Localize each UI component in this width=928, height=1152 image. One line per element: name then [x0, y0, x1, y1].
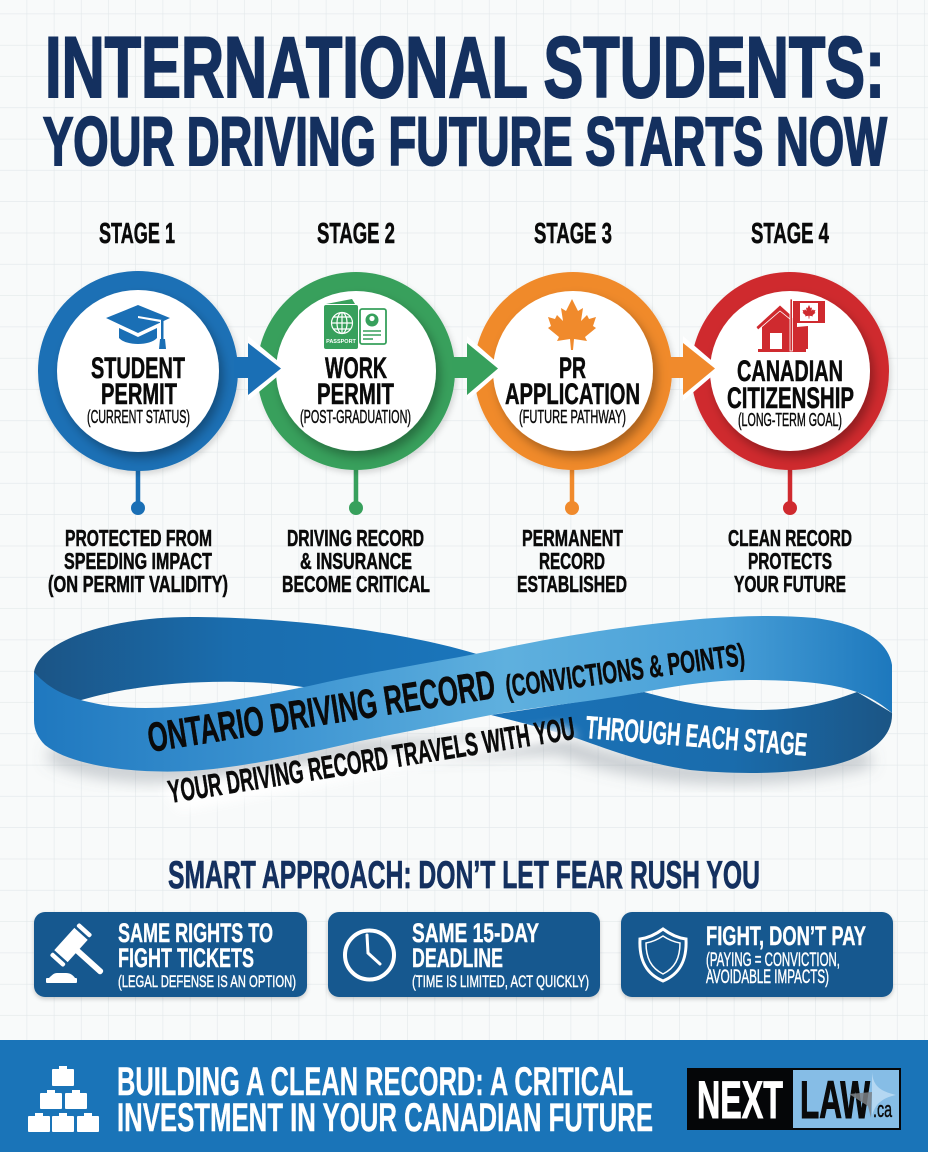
card: same rights to fight tickets [34, 912, 307, 997]
stage 3 caption: ESTABLISHED [517, 571, 627, 597]
arrow: stage 3 to stage 4 [669, 336, 721, 401]
infinity ribbon: Ontario driving record: (CONVICTIONS & POINTS) [503, 637, 747, 704]
stage 4: Canadian citizenship: (LONG-TERM GOAL) [738, 410, 842, 430]
stage 4 caption: PROTECTS [748, 548, 832, 574]
stage 1: student permit [38, 271, 238, 515]
card: same rights to fight tickets: FIGHT TICKETS [118, 943, 254, 973]
stage 1: student permit: (CURRENT STATUS) [87, 407, 190, 427]
icon: passport and ID card [324, 299, 386, 349]
stage 2 caption: DRIVING RECORD [287, 525, 424, 551]
title [43, 20, 888, 180]
stage 3: PR application: PR [559, 352, 586, 385]
logo: Next Law: NEXT [697, 1071, 783, 1130]
stage 2: work permit: WORK [325, 352, 387, 385]
card: same 15-day deadline [328, 912, 600, 997]
card: fight, don't pay: AVOIDABLE IMPACTS) [706, 967, 829, 988]
stage 2: work permit: PERMIT [317, 378, 394, 411]
stage 3 caption [517, 525, 627, 597]
stage 1 caption: (ON PERMIT VALIDITY) [48, 571, 228, 597]
icon: passport and ID card: PASSPORT [326, 339, 357, 345]
stage 2: work permit: (POST-GRADUATION) [300, 407, 411, 427]
card: same 15-day deadline: DEADLINE [412, 943, 503, 973]
stage 4 caption: YOUR FUTURE [734, 571, 846, 597]
footer banner: BUILDING A CLEAN RECORD: A CRITICAL [117, 1060, 633, 1104]
icon: gavel [46, 923, 117, 989]
stage 2 caption: & INSURANCE [300, 548, 412, 574]
stage 2: work permit [257, 272, 455, 515]
icon: maple leaf [548, 299, 596, 350]
stage 4: Canadian citizenship: CITIZENSHIP [727, 382, 854, 415]
stage 3: PR application: APPLICATION [505, 378, 640, 411]
stage 1 caption [48, 525, 228, 597]
logo: Next Law: LAW [800, 1071, 870, 1130]
infinity ribbon: Ontario driving record [34, 616, 892, 812]
card: fight, don't pay: (PAYING = CONVICTION, [706, 950, 840, 971]
footer banner [0, 1040, 928, 1152]
icon: house with Canadian flag [756, 299, 825, 352]
logo: Next Law [687, 1068, 901, 1130]
stage labels [99, 218, 829, 250]
arrow: stage 2 to stage 3 [452, 336, 504, 401]
stage labels: STAGE 2 [317, 218, 395, 250]
stage 3: PR application: (FUTURE PATHWAY) [519, 407, 626, 427]
infinity ribbon: Ontario driving record: ONTARIO DRIVING RECORD [144, 661, 498, 761]
card: same rights to fight tickets: SAME RIGHTS TO [118, 918, 273, 948]
footer banner: INVESTMENT IN YOUR CANADIAN FUTURE [117, 1096, 653, 1140]
stage 3 caption: RECORD [539, 548, 605, 574]
logo: Next Law: .ca [873, 1097, 892, 1122]
stage 2 caption: BECOME CRITICAL [282, 571, 430, 597]
infinity ribbon: Ontario driving record: YOUR DRIVING RECORD TRAVELS WITH YOU [165, 710, 577, 810]
stage 1 caption: PROTECTED FROM [65, 525, 212, 551]
stage 1: student permit: STUDENT [91, 352, 185, 385]
icon: graduation cap [106, 305, 170, 349]
stage 3 caption: PERMANENT [522, 525, 623, 551]
stage 4 caption: CLEAN RECORD [728, 525, 852, 551]
stage 2 caption [282, 525, 430, 597]
card: same 15-day deadline: SAME 15-DAY [412, 918, 539, 948]
stage labels: STAGE 1 [99, 218, 175, 250]
arrow: stage 1 to stage 2 [234, 336, 287, 401]
card: fight, don't pay [621, 912, 893, 997]
stage labels: STAGE 4 [751, 218, 829, 250]
stage 4 caption [728, 525, 852, 597]
stage 4: Canadian citizenship [691, 272, 889, 515]
stage 4: Canadian citizenship: CANADIAN [737, 355, 843, 388]
stage 1 caption: SPEEDING IMPACT [64, 548, 212, 574]
icon: shield [640, 929, 686, 981]
stage labels: STAGE 3 [534, 218, 612, 250]
stage 3: PR application [474, 272, 672, 515]
card: same 15-day deadline: (TIME IS LIMITED, ACT QUICKLY) [412, 972, 589, 991]
stage 1: student permit: PERMIT [101, 378, 177, 411]
card: same rights to fight tickets: (LEGAL DEFENSE IS AN OPTION) [118, 972, 296, 991]
icon: clock [345, 930, 394, 980]
icon: stacked bricks [28, 1066, 99, 1132]
